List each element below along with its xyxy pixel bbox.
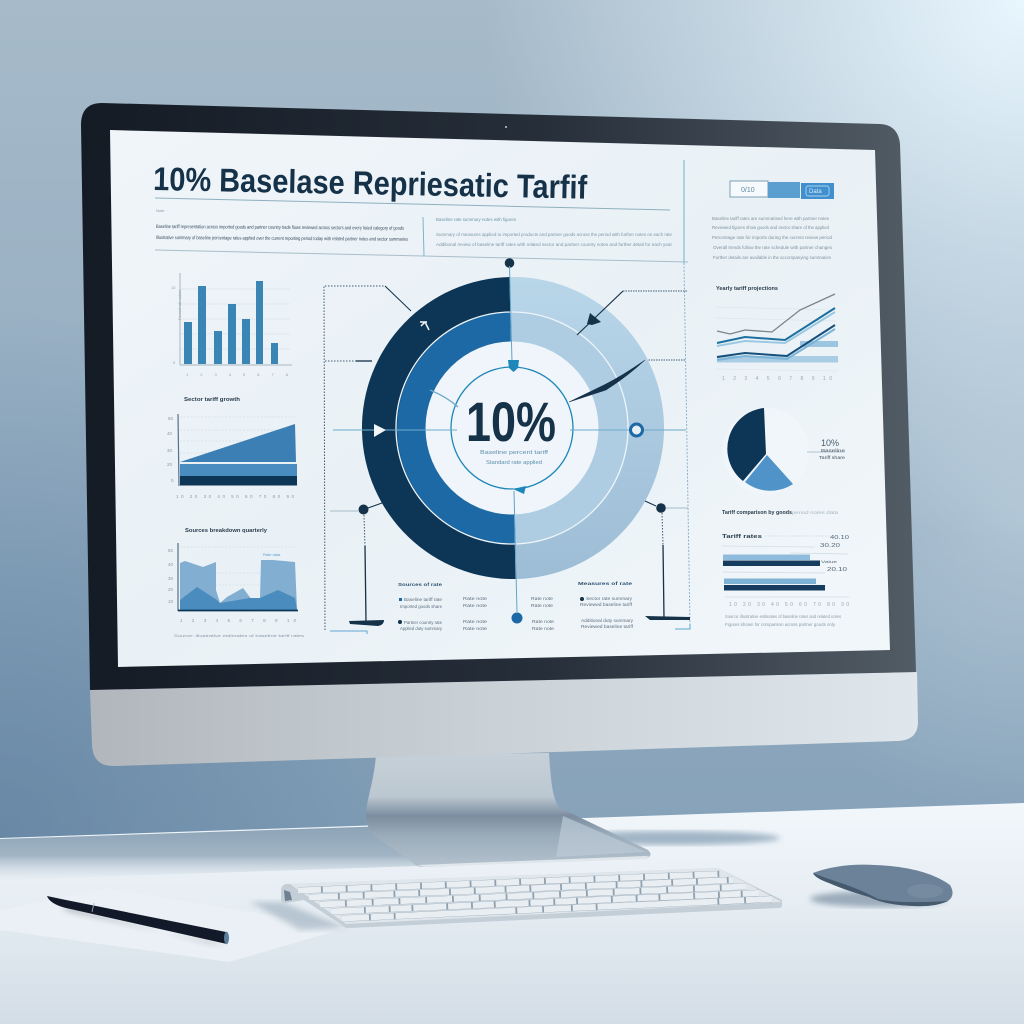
arrow right [569,360,645,402]
monitor chin [90,672,918,766]
horizontal bar chart: Tariff rates [722,534,762,540]
inner circle [451,367,573,489]
area chart: tariff breakdown: 30 [168,576,174,581]
mouse [810,865,953,907]
donut legend: Rate note [532,626,555,631]
horizontal bar chart [722,510,849,627]
intro text block: Note [156,208,165,213]
donut legend: Rate note [463,626,488,631]
horizontal bar chart: 30.20 [820,543,840,549]
outer ring [362,277,516,579]
horizontal bar chart: Figures shown for comparison across partner goods only [725,622,836,627]
keyboard [250,868,782,930]
area chart: tariff breakdown: 40 [168,562,174,567]
center caption: Standard rate applied [486,460,542,466]
bar chart [171,273,292,377]
intro text block: Baseline tariff representation across imported goods and partner country trade flows reviewed across sectors and every listed category of goods [156,224,404,232]
pie chart [723,408,846,494]
bottom arrow and dot [513,486,526,494]
donut legend: Sector rate summary [586,596,633,601]
donut legend: Sources of rate [398,582,443,587]
bar chart: 0 [173,360,176,365]
horizontal bar chart: period notes data [792,510,839,515]
donut legend: Additional duty summary [581,618,634,623]
title: 10% Baselase Repriesatic Tarfif [153,160,588,206]
intro text block: Illustrative summary of baseline percentage rates applied over the current reporting period today with related partner notes and sector summaries [156,235,408,243]
line chart: Yearly tariff projections [716,286,778,292]
desk surface [0,803,1024,1024]
donut legend: Baseline tariff rate [404,597,443,602]
area chart: tariff growth: Sector tariff growth [184,397,241,403]
horizontal bar chart: Tariff comparison by goods [722,510,792,516]
right text block: Overall trends follow the rate schedule with partner changes [713,245,833,250]
area chart: tariff breakdown: Source: illustrative estimates of baseline tariff rates [174,634,304,638]
panel divider [683,160,685,263]
area chart: tariff growth: 50 [168,416,174,421]
horizontal bar chart: 10 20 30 40 50 60 70 80 90 [729,602,849,608]
monitor stand [366,753,651,867]
center caption [480,450,549,466]
bar chart: 10 [171,285,176,290]
area chart: tariff breakdown: 50 [168,548,174,553]
pie chart: Baseline [821,448,846,453]
side text block: Additional review of baseline tariff rates with related sector and partner country notes and further detail for each year [436,242,673,247]
center caption: Baseline percent tariff [480,450,549,456]
area chart: tariff breakdown [168,528,304,638]
donut legend [398,581,634,631]
screen content [153,160,849,638]
arc left [430,390,458,407]
area chart: tariff growth: 30 [167,448,173,453]
area chart: tariff growth: 10 20 30 40 50 60 70 80 90 [176,494,294,499]
right text block: Reviewed figures show goods and sector share of the applied [712,225,829,230]
header tabs [730,181,834,199]
donut chart [362,277,664,579]
header tabs: 0/10 [741,187,755,194]
left lower node [358,504,368,514]
area chart: tariff growth: 20 [167,462,173,467]
donut legend: Measures of rate [578,581,633,586]
area chart: tariff breakdown: 10 [168,599,174,604]
area chart: tariff growth: 40 [167,431,173,436]
ring marker [630,424,642,436]
line chart [716,286,838,382]
side text block: Baseline rate summary notes with figures [436,217,517,222]
top marker [505,258,514,268]
header tabs: Data [809,189,822,195]
donut legend: Reviewed baseline tariff [580,602,633,607]
area chart: tariff growth: 0 [171,478,174,483]
bar chart: Percent rate values [178,290,182,320]
monitor bezel [81,103,916,690]
donut legend: Imported goods share [400,604,442,609]
white tick on dark ring [420,322,429,330]
center value: 10% [466,390,556,453]
donut legend: Rate note [463,619,488,624]
pie chart: Tariff share [819,455,846,460]
donut legend: Rate note [463,603,488,608]
area chart: tariff breakdown: 1 2 3 4 5 6 7 8 9 10 [180,618,296,623]
area chart: tariff breakdown: Rate data [263,552,281,557]
paper [0,888,346,962]
header rules [155,198,688,262]
center hole [426,342,598,514]
screen [110,130,890,667]
side text block: Summary of measures applied to imported products and partner goods across the period with further notes on each rate [436,232,672,237]
right text block: Further details are available in the accompanying summaries [713,255,832,260]
donut legend: Applied duty summary [400,626,443,631]
right text block: Baseline tariff rates are summarised here with partner notes [712,216,830,221]
pen [47,896,229,945]
pie chart: 10% [821,438,839,448]
donut legend: Partner country rate [404,620,442,625]
bar chart: 1 2 3 4 5 6 7 8 [186,372,289,377]
horizontal bar chart: 40.10 [830,535,849,541]
line chart: 1 2 3 4 5 6 7 8 9 10 [722,376,832,382]
donut legend: Rate note [463,596,488,601]
horizontal axis [333,429,457,431]
horizontal bar chart: Value [821,560,837,564]
horizontal bar chart: 20.10 [827,567,847,573]
intro text block [156,208,408,243]
area chart: tariff breakdown: Sources breakdown quarterly [185,528,268,534]
area chart: tariff growth [167,397,297,499]
arrow upper right [577,291,623,335]
side text block [436,217,673,247]
base bars [349,620,384,626]
area chart: tariff breakdown: 20 [168,587,174,592]
donut legend: Reviewed baseline tariff [581,624,634,629]
middle ring [397,312,516,544]
donut legend: Rate note [532,619,555,624]
callout lines and markers [330,258,690,634]
horizontal bar chart: Source: illustrative estimates of baseline rates and related notes [725,614,841,619]
right lower node [656,503,666,513]
donut legend: Rate note [531,603,554,608]
donut legend: Rate note [531,596,554,601]
dashed callout frame [324,286,688,630]
right text block: Percentage rate for imports during the current review period [712,235,832,240]
right text block [712,216,833,260]
webcam [505,126,507,128]
